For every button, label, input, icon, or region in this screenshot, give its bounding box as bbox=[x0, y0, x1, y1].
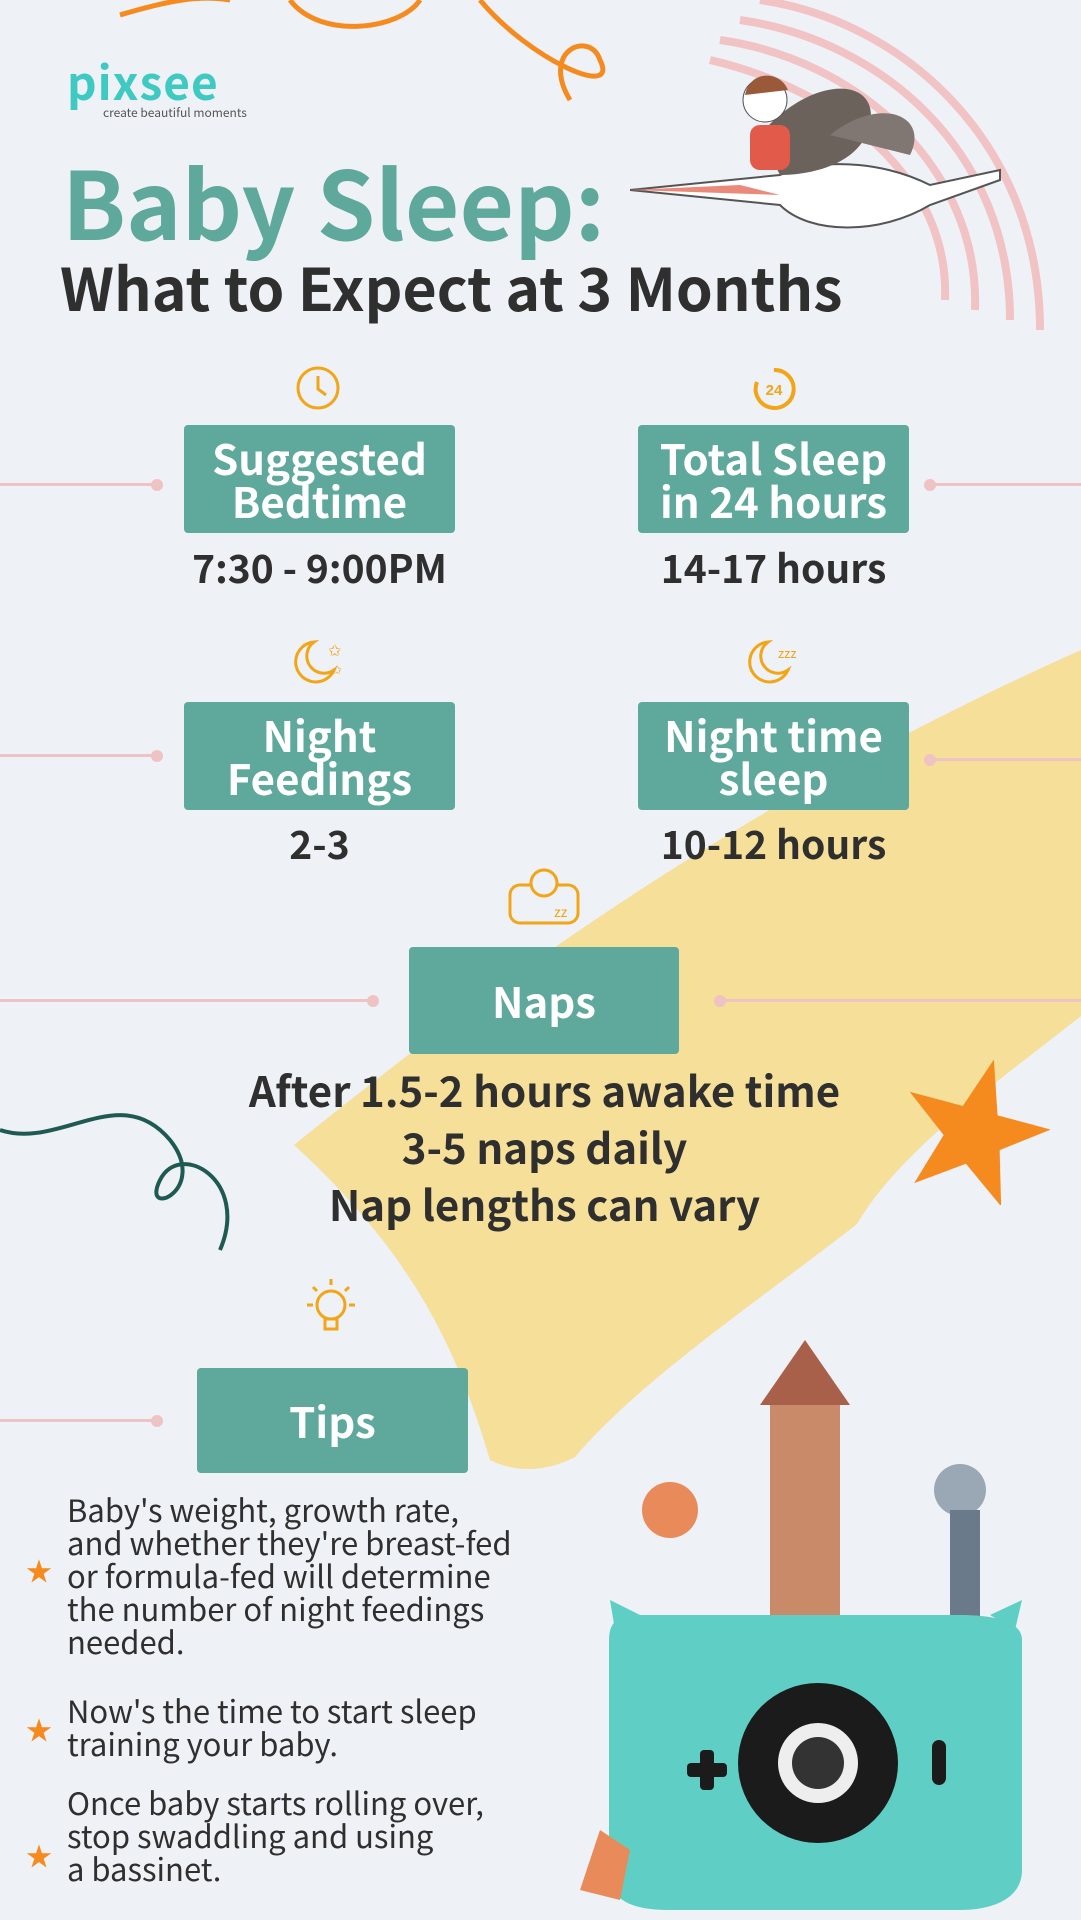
panel: total sleep bbox=[638, 368, 1081, 595]
icon: moon stars: ✩ bbox=[328, 637, 342, 661]
heading: sleep bbox=[719, 747, 828, 808]
tip 1 bbox=[26, 1486, 512, 1663]
tip 2 bbox=[26, 1687, 477, 1765]
tip 3 bbox=[26, 1779, 484, 1890]
panel: night feedings bbox=[0, 637, 455, 871]
heading: Bedtime bbox=[232, 470, 407, 531]
tip 1: the number of night feedings bbox=[67, 1585, 484, 1630]
heading bbox=[409, 947, 679, 1054]
heading: Feedings bbox=[227, 747, 412, 808]
icon: 24h bbox=[754, 368, 796, 410]
heading: Night time bbox=[664, 704, 883, 765]
panel: naps bbox=[0, 868, 1081, 1234]
tip 2: training your baby. bbox=[67, 1720, 338, 1765]
logo: create beautiful moments bbox=[103, 104, 247, 121]
icon: pillow clock bbox=[508, 868, 580, 924]
heading: Total Sleep bbox=[660, 427, 887, 488]
value: 7:30 - 9:00PM bbox=[192, 539, 447, 595]
heading bbox=[638, 425, 909, 533]
tip 1: or formula-fed will determine bbox=[67, 1552, 491, 1597]
tip 3: stop swaddling and using bbox=[67, 1812, 433, 1857]
icon: orange star bbox=[910, 1060, 1050, 1205]
tip 2: Now's the time to start sleep bbox=[67, 1687, 477, 1732]
text block: nap details: Nap lengths can vary bbox=[329, 1173, 760, 1234]
icon: moon zzz bbox=[748, 640, 797, 684]
icon: moon zzz: zzz bbox=[778, 643, 797, 662]
panel: tips bbox=[0, 1279, 512, 1890]
icon: moon stars bbox=[294, 637, 342, 684]
panel: suggested bedtime bbox=[0, 366, 455, 595]
subtitle: What to Expect at 3 Months bbox=[60, 243, 842, 328]
heading bbox=[197, 1368, 468, 1473]
heading bbox=[184, 702, 455, 810]
heading: Naps bbox=[492, 970, 596, 1031]
icon: moon stars: ✩ bbox=[332, 661, 342, 678]
title: Baby Sleep: bbox=[62, 132, 605, 268]
value: 14-17 hours bbox=[661, 539, 886, 595]
heading: in 24 hours bbox=[660, 470, 887, 531]
tip 1: and whether they're breast-fed bbox=[67, 1519, 512, 1564]
heading: Tips bbox=[289, 1390, 376, 1451]
icon: pillow clock: zz bbox=[554, 902, 568, 922]
tip 1: ★ bbox=[26, 1552, 52, 1589]
value: 10-12 hours bbox=[661, 815, 886, 871]
heading bbox=[638, 702, 909, 810]
tip 3: Once baby starts rolling over, bbox=[67, 1779, 484, 1824]
tip 1: Baby's weight, growth rate, bbox=[67, 1486, 459, 1531]
heading: Suggested bbox=[212, 427, 427, 488]
illustration: pixsee camera with characters bbox=[580, 1340, 1022, 1910]
icon: light bulb bbox=[307, 1279, 355, 1330]
tip 3: a bassinet. bbox=[67, 1845, 221, 1890]
heading: Night bbox=[263, 704, 376, 765]
logo: pixsee bbox=[67, 48, 219, 114]
heading bbox=[184, 425, 455, 533]
illustration: stork bbox=[630, 76, 1001, 228]
icon: 24h: 24 bbox=[766, 382, 783, 399]
tip 2: ★ bbox=[26, 1711, 52, 1748]
text block: nap details: After 1.5-2 hours awake time bbox=[249, 1059, 840, 1120]
panel: night time sleep bbox=[638, 640, 1081, 871]
text block: nap details: 3-5 naps daily bbox=[402, 1116, 687, 1177]
text block: nap details bbox=[248, 1059, 840, 1234]
tip 1: needed. bbox=[67, 1618, 184, 1663]
icon: clock bbox=[296, 366, 340, 410]
tip 3: ★ bbox=[26, 1837, 52, 1874]
value: 2-3 bbox=[289, 815, 350, 871]
